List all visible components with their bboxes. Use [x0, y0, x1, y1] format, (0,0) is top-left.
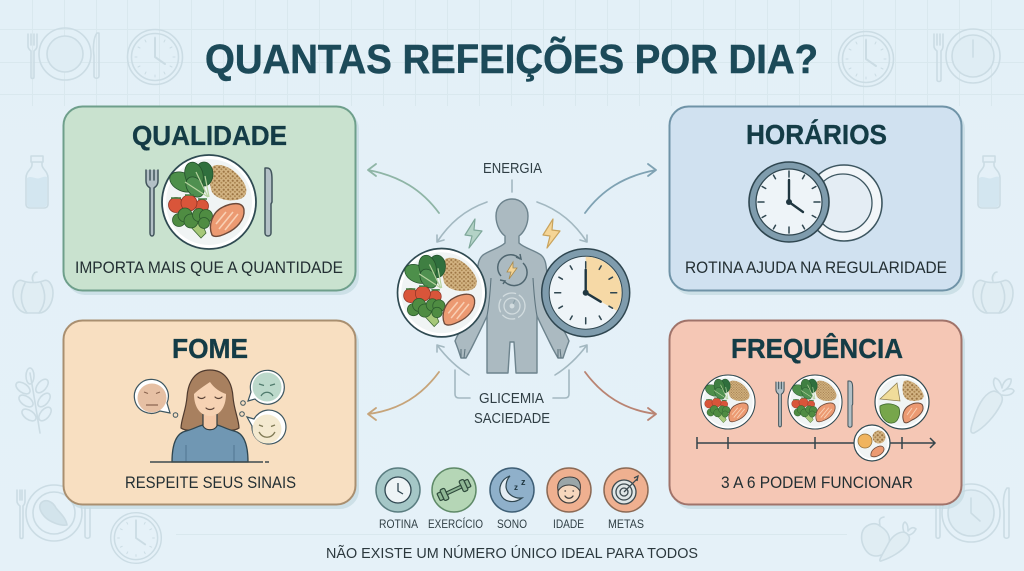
icon: plate three	[875, 375, 929, 429]
icon: yellow lightning	[543, 219, 560, 248]
heading: qualidade: QUALIDADE	[132, 120, 287, 151]
caption: fome: RESPEITE SEUS SINAIS	[125, 474, 296, 492]
icon: green lightning	[465, 219, 482, 248]
outer arrow: to frequencia	[585, 372, 656, 420]
factor: exercicio	[428, 468, 483, 531]
label: metas: METAS	[608, 519, 644, 531]
decorative icons: left side	[13, 156, 54, 433]
label: idade: IDADE	[553, 519, 584, 531]
icon: stomach gauge	[499, 293, 525, 319]
panel: qualidade	[64, 106, 359, 295]
icon: empty plate	[806, 165, 882, 241]
footer statement: NÃO EXISTE UM NÚMERO ÚNICO IDEAL PARA TODOS	[326, 545, 698, 562]
factor: rotina	[376, 468, 420, 531]
heading: horarios: HORÁRIOS	[746, 119, 887, 150]
decorative icons: bottom right	[862, 484, 1009, 561]
outer arrow: to horarios	[585, 164, 656, 213]
label: exercicio: EXERCÍCIO	[428, 518, 483, 531]
factor: sono	[490, 468, 534, 531]
icon: knife	[265, 168, 272, 236]
icon: fork	[146, 170, 158, 236]
icon: clock	[749, 162, 829, 242]
illustration: woman with eyes closed	[150, 370, 269, 462]
illustration: human body	[455, 199, 569, 373]
decorative icons: top right	[838, 29, 1000, 86]
decorative icons: top left	[28, 28, 182, 84]
icon: plate one	[701, 375, 755, 429]
factor: metas	[604, 468, 648, 531]
icon: plate two	[788, 375, 842, 429]
title: QUANTAS REFEIÇÕES POR DIA?	[205, 36, 818, 82]
caption: horarios: ROTINA AJUDA NA REGULARIDADE	[685, 259, 947, 277]
caption: frequencia: 3 A 6 PODEM FUNCIONAR	[721, 474, 913, 492]
panel: frequencia	[670, 320, 965, 509]
factor: idade	[547, 468, 591, 531]
label: rotina: ROTINA	[379, 519, 418, 531]
label: energia: ENERGIA	[483, 160, 542, 177]
icon: small snack plate	[854, 425, 890, 461]
icon: fork	[776, 382, 784, 427]
label: saciedade: SACIEDADE	[474, 410, 550, 427]
inner arrows	[437, 180, 587, 398]
panel: fome	[64, 320, 359, 509]
heading: frequencia: FREQUÊNCIA	[731, 333, 903, 364]
label: sono: SONO	[497, 519, 527, 531]
icon: sad face bubble	[241, 370, 284, 405]
decorative icons: right side	[971, 156, 1014, 433]
decorative icons: bottom left	[17, 485, 161, 563]
icon: center clock with shaded quarter	[542, 249, 630, 337]
outer arrow: to qualidade	[368, 164, 439, 213]
factor: sono: z	[514, 483, 518, 492]
icon: center plate of food	[398, 249, 486, 337]
icon: knife	[848, 381, 853, 427]
factor: sono: z	[521, 477, 526, 487]
icon: metabolism cycle	[498, 254, 527, 286]
timeline arrow	[697, 437, 935, 449]
panel: horarios	[670, 106, 965, 295]
icon: happy face bubble	[240, 410, 286, 444]
label: glicemia: GLICEMIA	[479, 390, 544, 407]
icon: plate of food	[162, 155, 256, 249]
heading: fome: FOME	[172, 333, 248, 364]
outer arrow: to fome	[368, 372, 439, 420]
icon: neutral face bubble	[134, 379, 178, 417]
caption: qualidade: IMPORTA MAIS QUE A QUANTIDADE	[75, 259, 343, 277]
